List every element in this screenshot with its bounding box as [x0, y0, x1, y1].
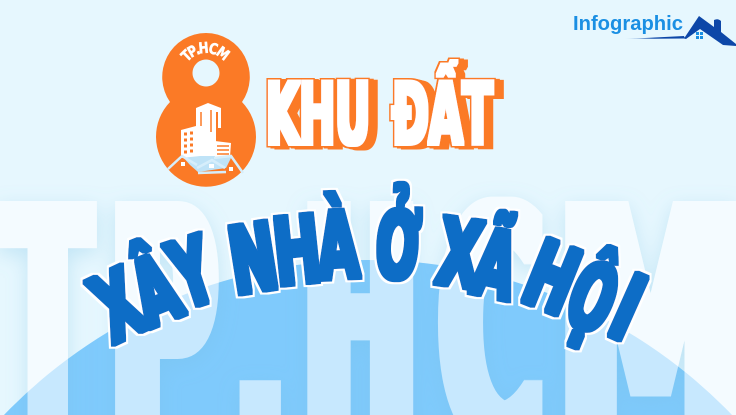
- arc label: TP.HCM: .: [193, 41, 202, 59]
- icon: city buildings and houses: [168, 103, 243, 173]
- logo house roof: [684, 16, 736, 46]
- arc label: TP.HCM: M: [212, 43, 233, 65]
- headline: XÂY NHÀ Ở XÃ HỘI: [77, 181, 658, 364]
- background title: TP.HCM: [0, 196, 736, 415]
- blue dome: [0, 260, 736, 415]
- headline: XÂY NHÀ Ở XÃ HỘI: I: [596, 256, 658, 362]
- word ĐẤT: ĐẤT: [392, 53, 493, 165]
- figure 8 shape: [156, 33, 256, 187]
- arc label: TP.HCM: [178, 39, 233, 65]
- headline: XÂY NHÀ Ở XÃ HỘI: H: [269, 196, 326, 307]
- logo swoosh: [624, 36, 685, 39]
- headline: XÂY NHÀ Ở XÃ HỘI: À: [315, 191, 361, 301]
- arc label: TP.HCM: C: [207, 40, 220, 59]
- headline: XÂY NHÀ Ở XÃ HỘI: N: [222, 203, 284, 316]
- headline: XÂY NHÀ Ở XÃ HỘI: Ở: [372, 181, 424, 302]
- headline: XÂY NHÀ Ở XÃ HỘI: Ộ: [553, 239, 633, 356]
- logo window: [696, 32, 703, 39]
- house windows: [181, 162, 233, 171]
- headline: XÂY NHÀ Ở XÃ HỘI: X: [431, 199, 488, 310]
- headline: XÂY NHÀ Ở XÃ HỘI: Â: [116, 233, 194, 349]
- headline: XÂY NHÀ Ở XÃ HỘI: Ã: [465, 208, 527, 322]
- arc label: TP.HCM: H: [198, 39, 209, 58]
- right building: [215, 141, 231, 157]
- headline: XÂY NHÀ Ở XÃ HỘI: Y: [157, 217, 228, 331]
- word KHU: KHU: [266, 66, 370, 166]
- house roofs: [168, 156, 243, 173]
- light blue base: [182, 156, 232, 172]
- heading: KHU ĐẤT: [266, 58, 504, 150]
- arc label: TP.HCM: P: [185, 42, 201, 62]
- arc label: TP.HCM: T: [178, 47, 197, 65]
- headline: XÂY NHÀ Ở XÃ HỘI: H: [510, 220, 593, 336]
- number 8 badge: [156, 33, 256, 187]
- brand logo: Infographic: [573, 13, 736, 46]
- logo wordmark: Infographic: [573, 13, 683, 35]
- headline: XÂY NHÀ Ở XÃ HỘI: X: [77, 249, 160, 364]
- central tower: [196, 103, 221, 156]
- left building: [181, 126, 200, 158]
